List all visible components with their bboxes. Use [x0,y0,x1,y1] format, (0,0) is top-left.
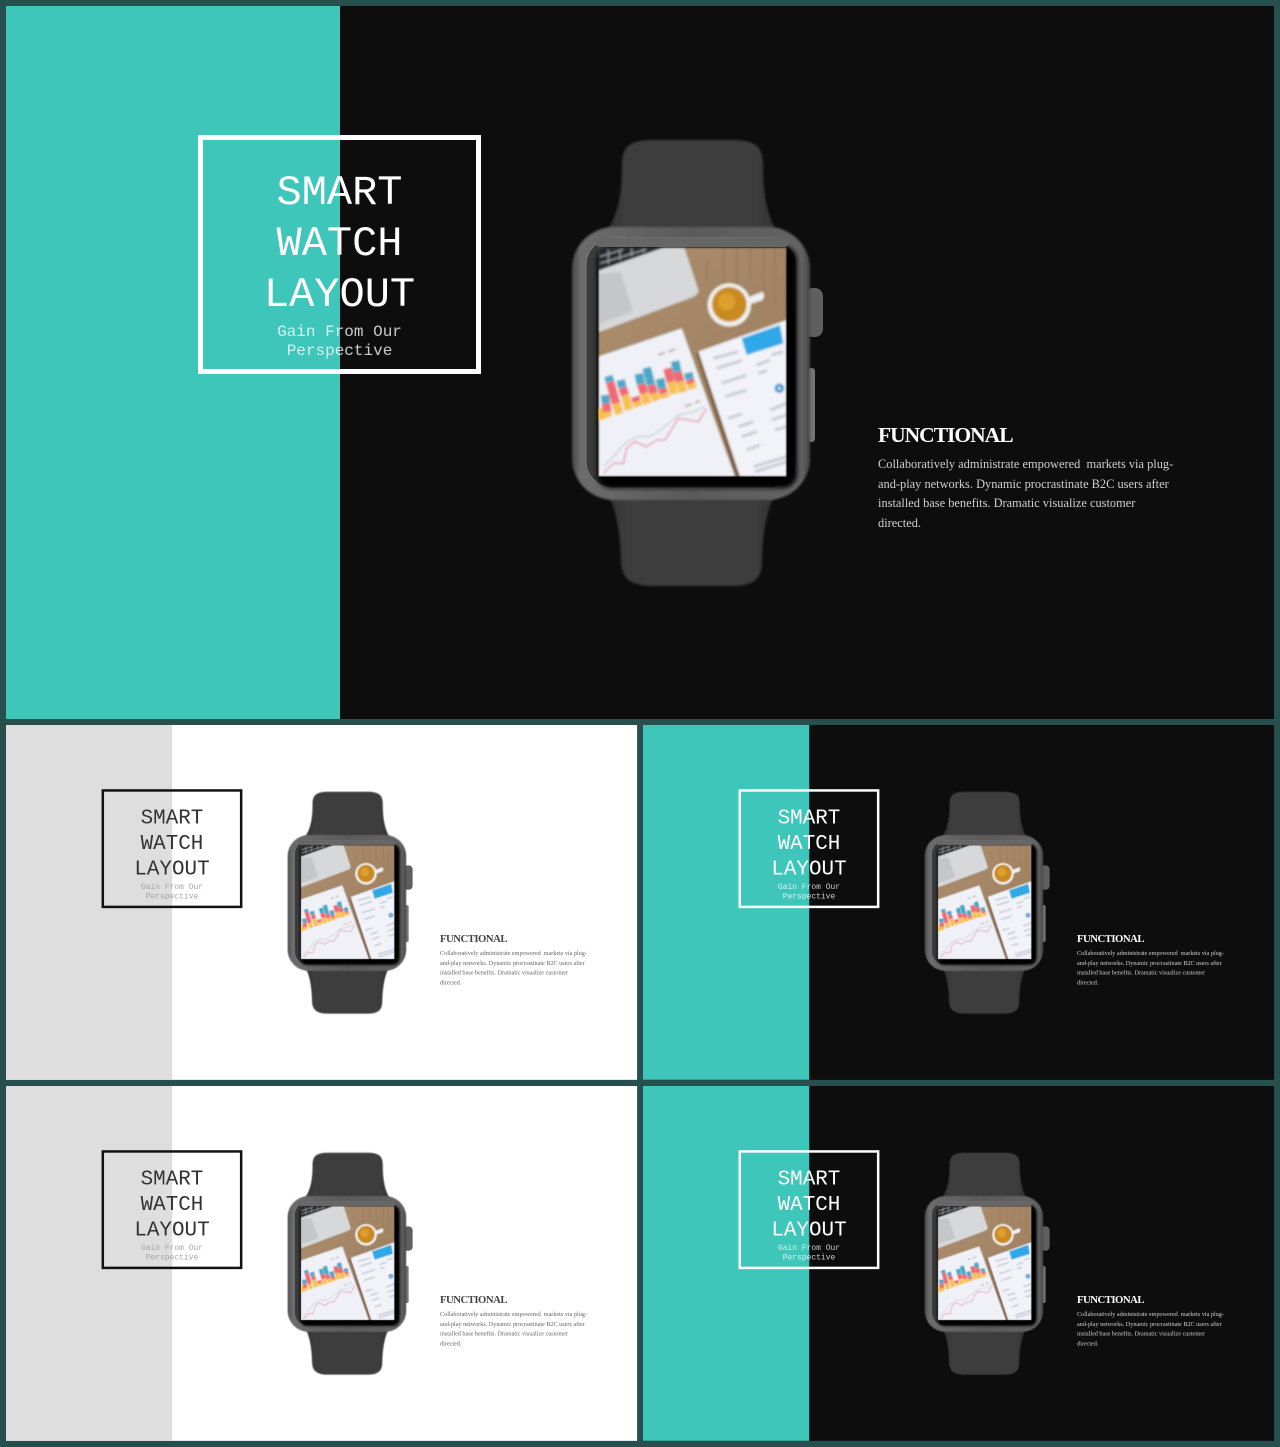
panel: small dark slide bottom [643,1086,1274,1441]
text block: functional [1077,1294,1224,1347]
body text: Collaboratively administrate empowered markets via plug- [440,949,587,956]
text block: functional [878,423,1173,530]
heading: smart watch layout: LAYOUT [771,857,847,881]
teal accent block [643,1086,809,1441]
body text: directed. [1077,1340,1098,1347]
body text: directed. [440,1340,461,1347]
subtitle [141,1244,203,1262]
body text [440,1310,587,1347]
heading: functional: FUNCTIONAL [440,1294,507,1305]
body text: Collaboratively administrate empowered markets via plug- [1077,949,1224,956]
text block: functional [1077,933,1224,986]
icon: smart watch with photo [286,1152,413,1376]
heading: smart watch layout: WATCH [276,220,403,268]
panel: small light slide bottom [6,1086,637,1441]
body text [440,949,587,986]
body text: and-play networks. Dynamic procrastinate B2C users after [1077,959,1222,966]
body text: Collaboratively administrate empowered markets via plug- [440,1310,587,1317]
heading: smart watch layout: LAYOUT [771,1218,847,1242]
subtitle: Perspective [783,892,835,901]
heading: functional: FUNCTIONAL [440,933,507,944]
heading: smart watch layout [134,1167,210,1242]
title frame [102,789,242,908]
heading: smart watch layout: SMART [778,806,840,830]
body text: directed. [440,979,461,986]
body text [878,457,1173,530]
title frame [739,1150,879,1269]
heading: functional: FUNCTIONAL [1077,1294,1144,1305]
heading: smart watch layout [771,806,847,881]
icon: smart watch with photo [924,791,1050,1014]
body text: directed. [1077,979,1098,986]
heading: smart watch layout [771,1167,847,1242]
body text: Collaboratively administrate empowered markets via plug- [1077,1310,1224,1317]
icon: smart watch with photo [286,790,413,1014]
subtitle: Gain From Our [277,323,402,341]
heading: smart watch layout: SMART [141,1167,203,1191]
body text: installed base benefits. Dramatic visualize customer [878,496,1135,510]
title frame [198,135,481,374]
panel: large dark slide [6,6,1274,719]
grey accent block [6,725,172,1080]
body text: and-play networks. Dynamic procrastinate B2C users after [440,1320,585,1327]
icon: smart watch with photo [924,1152,1050,1375]
subtitle: Gain From Our [778,1244,840,1253]
body text: installed base benefits. Dramatic visualize customer [440,1330,568,1337]
subtitle: Gain From Our [778,883,840,892]
heading: smart watch layout: SMART [778,1167,840,1191]
body text: directed. [878,516,921,530]
body text [1077,949,1224,986]
subtitle: Perspective [146,1253,198,1262]
body text: and-play networks. Dynamic procrastinate B2C users after [878,477,1169,491]
heading: smart watch layout: WATCH [141,832,203,855]
heading: smart watch layout: LAYOUT [264,271,415,319]
heading: smart watch layout [264,169,415,319]
body text: Collaboratively administrate empowered markets via plug- [878,457,1173,471]
text block: functional [440,1294,587,1347]
panel: small dark slide top [643,725,1274,1080]
subtitle [778,1244,840,1262]
text block: functional [440,933,587,986]
teal accent block [6,6,340,719]
body text: installed base benefits. Dramatic visualize customer [1077,1330,1205,1337]
body text [1077,1310,1224,1347]
heading: smart watch layout: WATCH [778,1193,840,1216]
title frame [102,1150,242,1269]
body text: installed base benefits. Dramatic visualize customer [440,969,568,976]
heading: functional: FUNCTIONAL [1077,933,1144,944]
heading: smart watch layout: WATCH [141,1193,203,1216]
subtitle [277,323,402,360]
grey accent block [6,1086,172,1441]
subtitle: Gain From Our [141,883,203,892]
body text: and-play networks. Dynamic procrastinate B2C users after [1077,1320,1222,1327]
body text: installed base benefits. Dramatic visualize customer [1077,969,1205,976]
heading: functional: FUNCTIONAL [878,423,1013,447]
subtitle [141,883,203,901]
subtitle: Perspective [783,1253,835,1262]
body text: and-play networks. Dynamic procrastinate B2C users after [440,959,585,966]
subtitle: Gain From Our [141,1244,203,1253]
icon: smart watch with photo [571,139,823,587]
panel: small light slide top [6,725,637,1080]
heading: smart watch layout: WATCH [778,832,840,855]
teal accent block [643,725,809,1080]
title frame [739,789,879,908]
heading: smart watch layout: LAYOUT [134,857,210,881]
subtitle: Perspective [287,342,392,360]
heading: smart watch layout [134,806,210,881]
heading: smart watch layout: SMART [141,806,203,830]
heading: smart watch layout: SMART [276,169,403,217]
heading: smart watch layout: LAYOUT [134,1218,210,1242]
subtitle: Perspective [146,892,198,901]
subtitle [778,883,840,901]
